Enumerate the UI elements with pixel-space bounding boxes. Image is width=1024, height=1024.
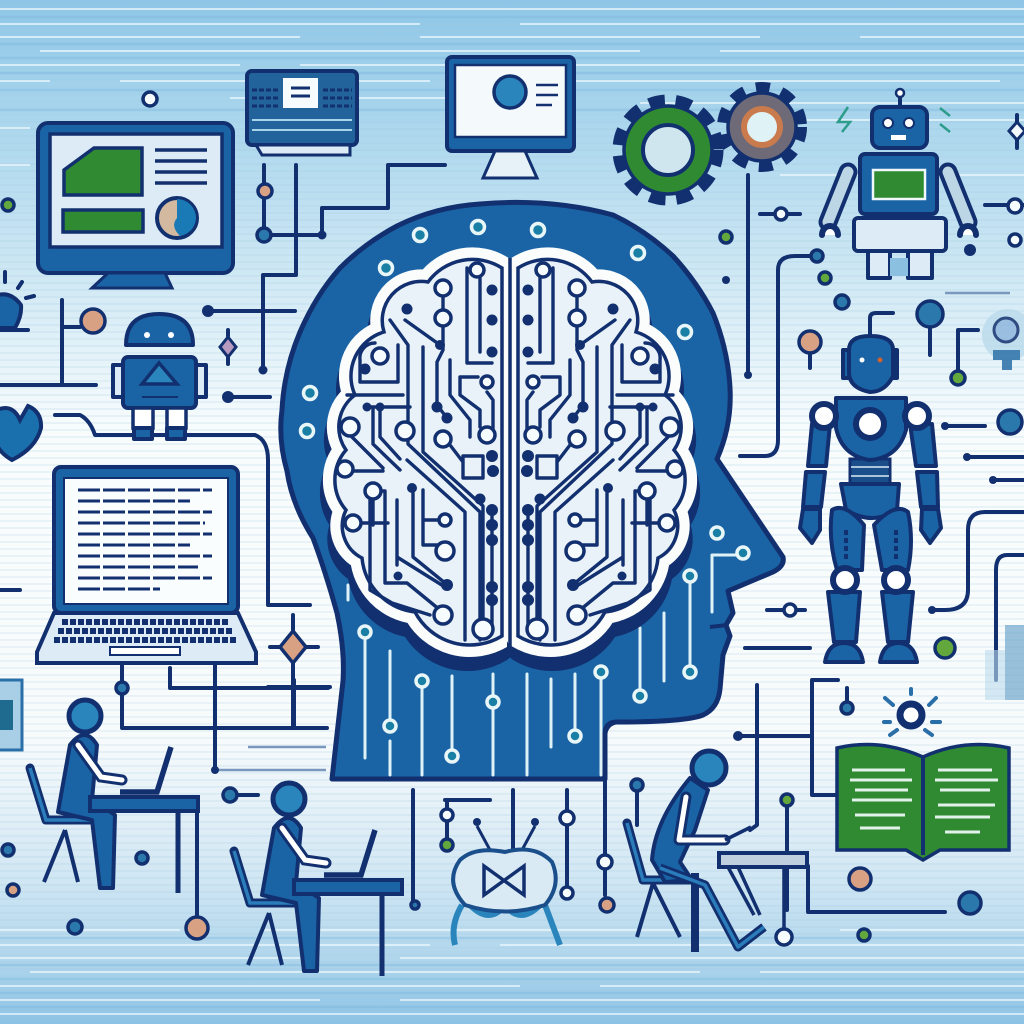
icon: diamonds (220, 122, 1024, 728)
monitor: top left code screen (247, 71, 357, 155)
robot: small android (113, 314, 206, 439)
book text lines (850, 770, 998, 832)
icon: open book (837, 745, 1009, 860)
icon: green bar (63, 210, 143, 232)
monitor: top centre (447, 57, 574, 178)
icon: faded picture left (0, 680, 22, 750)
mouth line (710, 625, 727, 627)
keyboard (37, 613, 256, 663)
person at desk: right (627, 751, 807, 952)
circuit connector lines (0, 115, 1024, 915)
icon: zigzag sparks (838, 107, 950, 132)
screen text lines (78, 490, 212, 589)
robot: humanoid (800, 313, 941, 662)
monitor: dashboard (38, 123, 233, 288)
person at desk: left (30, 700, 198, 893)
head decoration: white traces and rings (300, 220, 749, 775)
monitor stand (92, 273, 172, 288)
icon: cloud brain (453, 818, 560, 945)
brain: right hemisphere (518, 259, 687, 658)
brain: left hemisphere (333, 259, 502, 658)
icon: heart (0, 406, 41, 460)
icon: faded gear right (982, 309, 1024, 370)
icon: green chart (64, 148, 142, 195)
icon: faded monument right (985, 625, 1024, 700)
text lines (155, 150, 207, 183)
robot: boxy with green screen (822, 89, 976, 278)
icon: light bulb (0, 272, 34, 330)
person at desk: centre (234, 783, 402, 976)
icon: small gear right (884, 689, 940, 735)
laptop (37, 467, 256, 663)
icon: gears (618, 87, 802, 200)
brain: centre divide (508, 258, 512, 648)
head silhouette (281, 202, 783, 779)
icon: pie chart (157, 198, 197, 238)
